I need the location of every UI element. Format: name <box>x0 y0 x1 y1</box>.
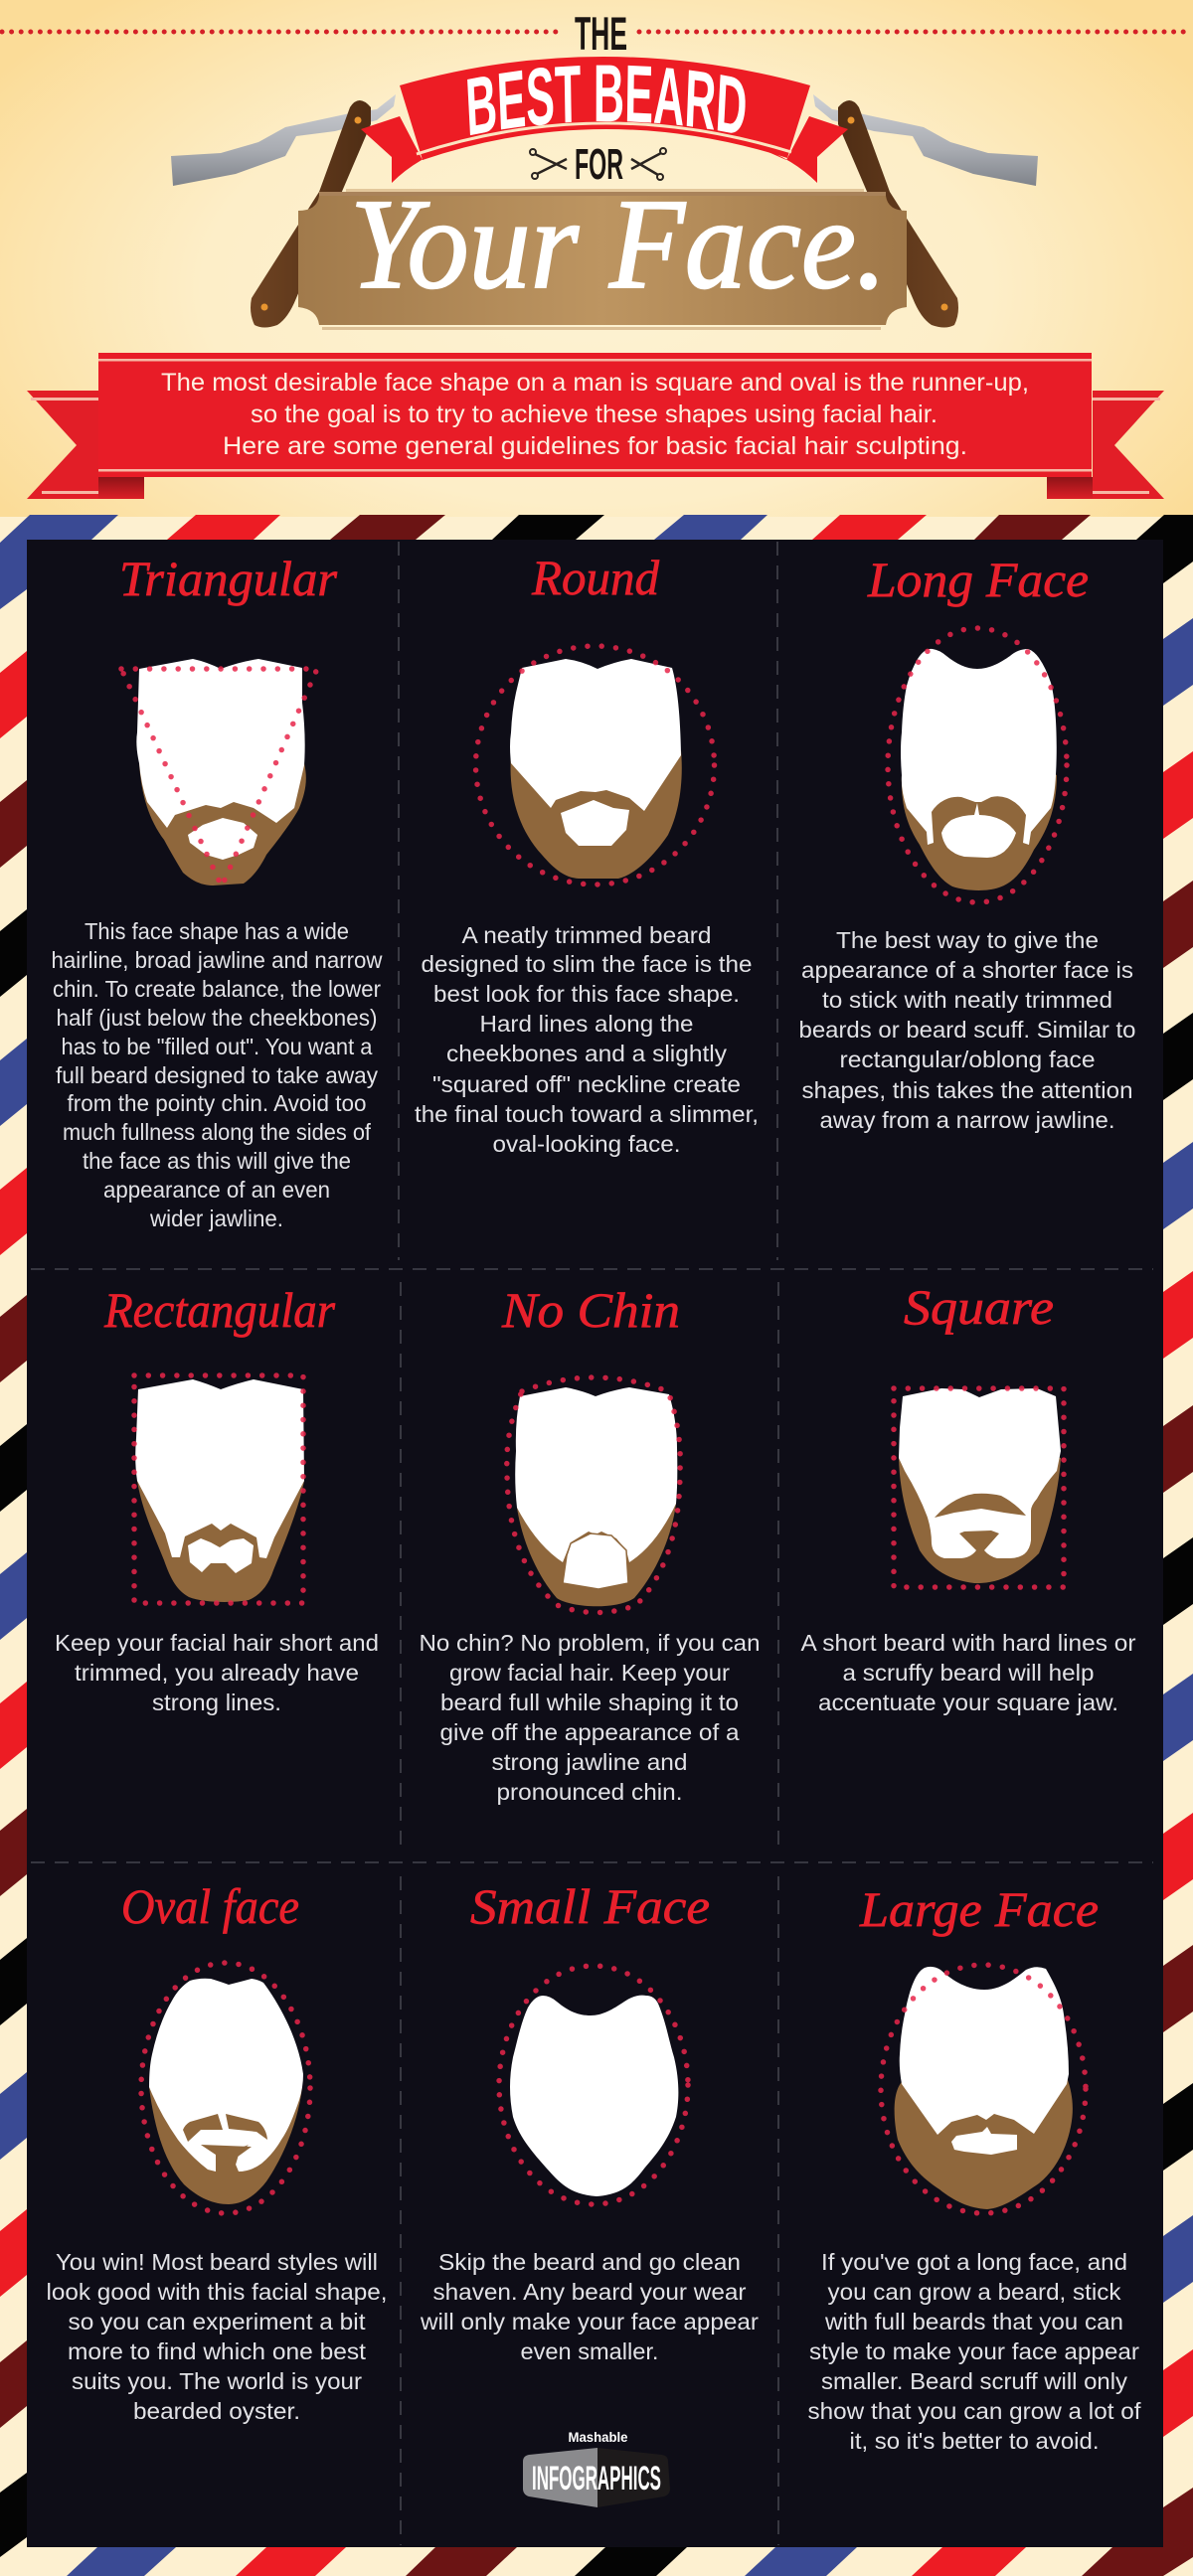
icon: no chin face <box>507 1377 680 1612</box>
description: Keep your facial hair short and <box>55 1630 379 1656</box>
heading: Triangular <box>119 551 338 606</box>
panel: Small Face <box>420 1878 759 2364</box>
ribbon tail left <box>27 391 144 499</box>
icon: round face <box>475 646 714 885</box>
description: wider jawline. <box>149 1206 283 1231</box>
logo: Mashable Infographics: INFOGRAPHICS <box>532 2460 661 2497</box>
description: A short beard with hard lines or <box>801 1630 1136 1656</box>
icon: long face <box>888 628 1067 902</box>
description: from the pointy chin. Avoid too <box>68 1090 366 1116</box>
description: the final touch toward a slimmer, <box>415 1101 759 1127</box>
red arched banner <box>361 57 848 183</box>
title: BEST BEARD: BEST BEARD <box>467 66 746 135</box>
description: If you've got a long face, and <box>821 2249 1127 2275</box>
panel: Round <box>415 550 759 1157</box>
description: away from a narrow jawline. <box>819 1107 1115 1133</box>
description <box>801 1630 1136 1715</box>
description: designed to slim the face is the <box>422 951 752 977</box>
heading: Small Face <box>470 1878 710 1934</box>
description: even smaller. <box>521 2338 658 2364</box>
top stripes <box>0 515 1193 609</box>
panel: Square <box>801 1279 1136 1715</box>
description: full beard designed to take away <box>56 1062 378 1088</box>
description <box>55 1630 379 1715</box>
ribbon tail right <box>1047 391 1164 499</box>
description: show that you can grow a lot of <box>807 2398 1141 2424</box>
icon: triangular face <box>121 659 317 886</box>
description: look good with this facial shape, <box>46 2279 388 2305</box>
heading: Large Face <box>859 1881 1099 1937</box>
description: to stick with neatly trimmed <box>822 987 1112 1013</box>
description: you can grow a beard, stick <box>827 2279 1121 2305</box>
description: it, so it's better to avoid. <box>849 2428 1100 2454</box>
logo: Mashable Infographics: Mashable <box>569 2429 628 2445</box>
heading: Long Face <box>867 552 1089 607</box>
razor right <box>813 94 1038 328</box>
title: Your Face: Your Face. <box>350 173 887 316</box>
description: give off the appearance of a <box>439 1719 740 1745</box>
description: hairline, broad jawline and narrow <box>52 947 383 973</box>
description: beards or beard scuff. Similar to <box>799 1017 1135 1043</box>
heading: Rectangular <box>103 1282 336 1338</box>
description: appearance of a shorter face is <box>801 957 1133 983</box>
razor left <box>171 94 396 328</box>
red ribbon intro <box>27 353 1164 499</box>
description <box>420 2249 759 2364</box>
panel: Long Face <box>799 552 1135 1133</box>
handle <box>251 100 371 328</box>
left stripes <box>0 651 27 2557</box>
description: shapes, this takes the attention <box>801 1077 1133 1103</box>
description: cheekbones and a slightly <box>446 1041 728 1066</box>
description <box>415 922 759 1157</box>
description: accentuate your square jaw. <box>818 1690 1118 1715</box>
description: You win! Most beard styles will <box>56 2249 378 2275</box>
icon: square face <box>894 1388 1064 1587</box>
intro text <box>161 369 1029 460</box>
panel: Large Face <box>807 1881 1141 2454</box>
blade <box>171 94 396 186</box>
bottom stripes <box>67 2547 1026 2576</box>
description: The best way to give the <box>836 927 1099 953</box>
description: strong lines. <box>152 1690 281 1715</box>
panel: No Chin <box>420 1282 760 1805</box>
description <box>807 2249 1141 2454</box>
icon: large face <box>881 1965 1086 2213</box>
description: best look for this face shape. <box>433 981 740 1007</box>
description: Skip the beard and go clean <box>438 2249 741 2275</box>
icon: scissors left <box>530 149 567 179</box>
description <box>46 2249 388 2424</box>
description: the face as this will give the <box>83 1148 351 1174</box>
description: A neatly trimmed beard <box>461 922 712 948</box>
icon: oval face <box>141 1963 310 2213</box>
description: with full beards that you can <box>824 2309 1123 2334</box>
icon: small face <box>499 1966 688 2204</box>
right stripes <box>1082 618 1193 2576</box>
panel: Rectangular <box>55 1282 379 1715</box>
description: bearded oyster. <box>133 2398 300 2424</box>
panel: Oval face <box>46 1878 388 2424</box>
icon: scissors right <box>631 148 666 180</box>
description: appearance of an even <box>103 1177 330 1203</box>
intro text: Here are some general guidelines for basic facial hair sculpting. <box>223 432 967 460</box>
heading: Round <box>531 550 660 605</box>
description: strong jawline and <box>491 1749 688 1775</box>
intro text: so the goal is to try to achieve these shapes using facial hair. <box>251 401 937 428</box>
description: chin. To create balance, the lower <box>53 976 381 1002</box>
description: so you can experiment a bit <box>68 2309 366 2334</box>
icon: rectangular face <box>134 1375 304 1603</box>
description: No chin? No problem, if you can <box>420 1630 760 1656</box>
description <box>799 927 1135 1133</box>
description <box>52 918 383 1231</box>
title: FOR with scissors: FOR <box>575 140 623 189</box>
description: half (just below the cheekbones) <box>56 1005 378 1031</box>
heading: Oval face <box>121 1878 299 1934</box>
description: style to make your face appear <box>809 2338 1139 2364</box>
title: THE: THE <box>575 7 627 60</box>
description: pronounced chin. <box>497 1779 682 1805</box>
description: more to find which one best <box>68 2338 367 2364</box>
description: grow facial hair. Keep your <box>449 1660 730 1686</box>
dark panel <box>27 540 1163 2547</box>
description: Hard lines along the <box>479 1011 694 1037</box>
description: suits you. The world is your <box>72 2368 362 2394</box>
description: trimmed, you already have <box>75 1660 359 1686</box>
heading: No Chin <box>501 1282 680 1338</box>
description: rectangular/oblong face <box>839 1046 1096 1072</box>
description: "squared off" neckline create <box>432 1071 741 1097</box>
description: shaven. Any beard your wear <box>433 2279 747 2305</box>
description: beard full while shaping it to <box>440 1690 739 1715</box>
grid dividers <box>31 542 1153 2545</box>
title: FOR with scissors <box>530 140 666 189</box>
header dotted rule <box>2 30 1191 34</box>
wooden sign <box>298 173 907 330</box>
description: This face shape has a wide <box>85 918 349 944</box>
description: a scruffy beard will help <box>843 1660 1094 1686</box>
description: oval-looking face. <box>493 1131 680 1157</box>
description: much fullness along the sides of <box>63 1119 372 1145</box>
description: has to be "filled out". You want a <box>62 1034 373 1059</box>
description: will only make your face appear <box>420 2309 759 2334</box>
intro text: The most desirable face shape on a man is square and oval is the runner-up, <box>161 369 1029 397</box>
panel: Triangular <box>52 551 383 1231</box>
description <box>420 1630 760 1805</box>
description: smaller. Beard scruff will only <box>821 2368 1128 2394</box>
heading: Square <box>904 1279 1054 1335</box>
logo: Mashable Infographics <box>523 2429 670 2507</box>
